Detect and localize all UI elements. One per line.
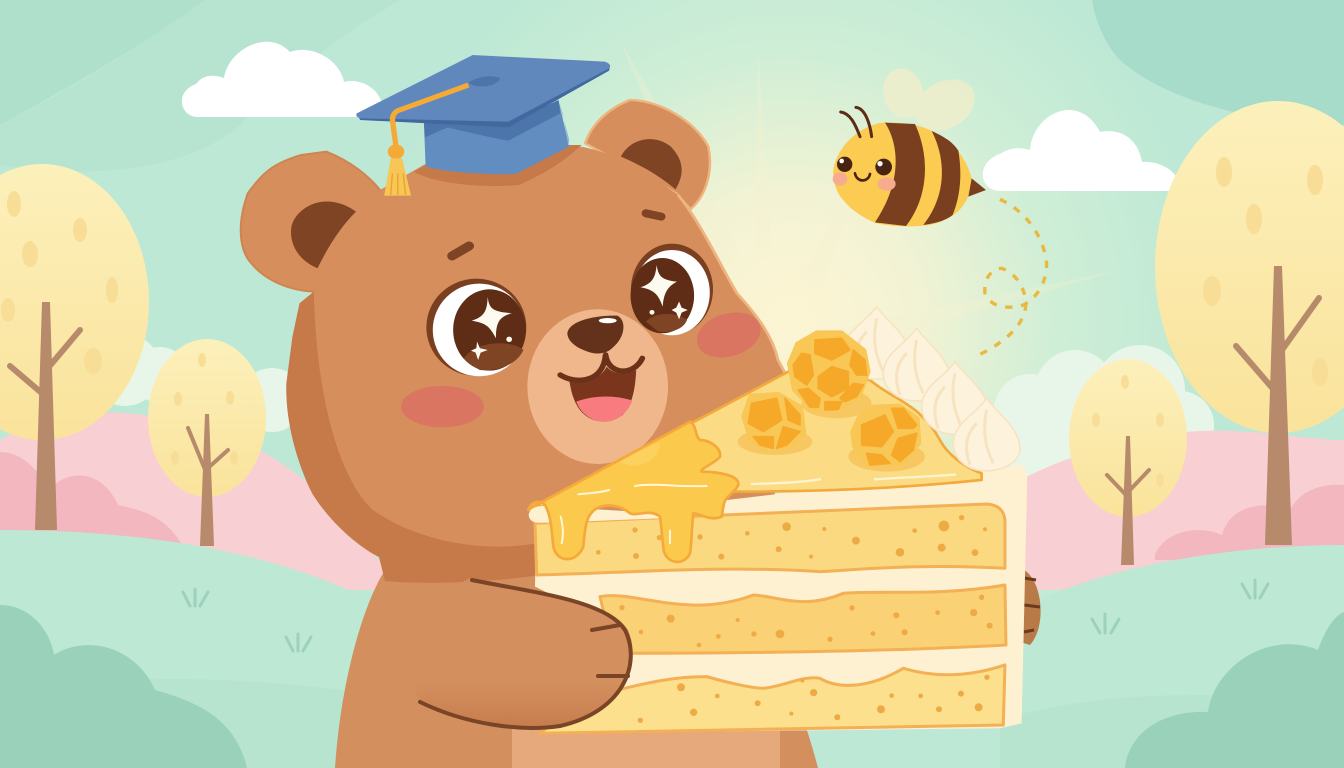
- tree: far left: [0, 164, 149, 530]
- cake: sponge crumbs: [596, 515, 993, 723]
- tassel: [384, 85, 468, 196]
- foreground bushes: [0, 605, 1344, 768]
- bee: body: [833, 122, 972, 226]
- cake: top surface: [528, 372, 982, 510]
- tree: small right: [1069, 359, 1187, 565]
- bear: [241, 55, 818, 768]
- bear: left eye: [426, 279, 526, 376]
- honeycomb: left: [743, 393, 805, 450]
- cake: top highlights: [752, 475, 955, 484]
- pink hills: [0, 412, 1344, 590]
- tree: far right: [1155, 101, 1344, 545]
- bear: eyebrows: [452, 213, 661, 256]
- cake: sponge layers: [535, 504, 1006, 733]
- cake: honeycomb pieces: [738, 332, 925, 472]
- bee: [833, 64, 1047, 356]
- bee: stripes: [875, 123, 986, 226]
- cake: cream base: [535, 465, 1027, 733]
- bear: head shading: [286, 292, 540, 565]
- bear front paw: [411, 578, 633, 728]
- bee: wings: [878, 64, 984, 141]
- bear: left ear: [241, 152, 380, 292]
- bee: flight trail: [977, 199, 1047, 356]
- bear: muzzle: [527, 309, 668, 464]
- grass tufts: [183, 580, 1268, 651]
- bear: body: [335, 560, 818, 768]
- bear: cheeks: [401, 304, 767, 427]
- bee: face: [833, 157, 896, 191]
- cake: honey drip: [528, 422, 738, 562]
- honeycomb: right: [852, 405, 920, 465]
- cake: icing tip: [529, 506, 660, 523]
- bear: neck shadow: [378, 535, 545, 583]
- bear: right ear: [585, 100, 710, 209]
- bee: antennae: [841, 107, 872, 137]
- bear: right eye: [631, 244, 713, 335]
- background clouds: [89, 42, 1214, 480]
- bear: belly: [512, 725, 780, 768]
- honeycomb: large: [788, 332, 869, 410]
- foreground green hills: [0, 530, 1344, 768]
- tree: small left: [148, 339, 266, 546]
- bear: head: [286, 145, 792, 565]
- honey cake slice: [528, 307, 1027, 733]
- bear back paw: [1020, 568, 1041, 645]
- graduation cap: [356, 55, 610, 196]
- cake: whipped cream: [843, 307, 1020, 471]
- bear: nose: [567, 316, 623, 354]
- bear: mouth: [560, 355, 642, 422]
